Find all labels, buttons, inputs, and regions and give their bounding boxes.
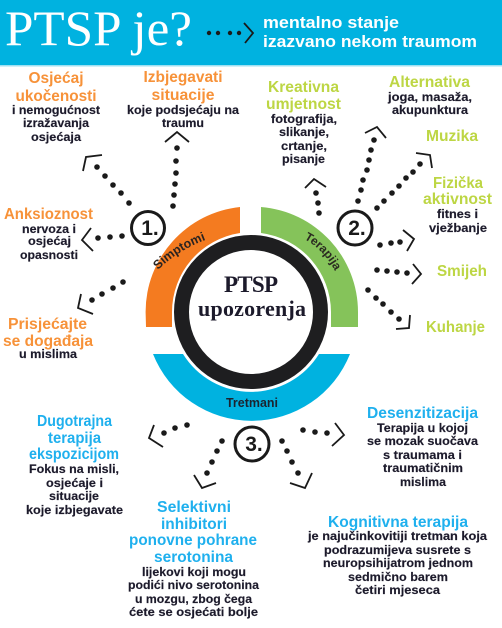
arrow: to Smijeh	[374, 264, 421, 284]
central diagram	[146, 207, 358, 421]
text: Desenzitizacija	[367, 405, 479, 489]
text: Desenzitizacija: mislima	[400, 477, 447, 489]
text: Dugotrajna terapija ekspozicijom: Fokus na misli,	[29, 464, 119, 476]
text: Dugotrajna terapija ekspozicijom: ekspozicijom	[29, 446, 119, 463]
badge 3: 3.	[245, 433, 263, 456]
arc: Tretmani: Tretmani	[226, 395, 278, 410]
text: Muzika: Muzika	[426, 128, 478, 145]
text: Anksioznost: opasnosti	[20, 250, 78, 262]
center title	[198, 272, 306, 321]
badge 1: 1.	[141, 217, 159, 240]
arrow: header	[207, 23, 253, 43]
center title: upozorenja	[198, 296, 306, 321]
ring	[182, 242, 320, 382]
text: Prisjecajte se dogadaja: u mislima	[19, 349, 78, 361]
text: Anksioznost	[4, 206, 93, 262]
badge 2: 2.	[348, 217, 366, 240]
text: Desenzitizacija: Terapija u kojoj	[377, 423, 468, 435]
text: Prisjecajte se dogadaja: se događaja	[3, 333, 93, 350]
text: Kuhanje: Kuhanje	[426, 319, 485, 336]
text: Selektivni inhibitori: lijekovi koji mogu	[142, 567, 246, 579]
text: Kreativna umjetnost	[266, 79, 341, 166]
text: Alternativa	[387, 74, 472, 117]
text: Desenzitizacija: traumatičnim	[383, 463, 463, 475]
arrow: to Dugotrajna terapija	[149, 422, 190, 447]
definition text: mentalno stanje	[263, 13, 399, 32]
text: Izbjegavati situacije: koje podsjećaju na	[127, 105, 240, 117]
text: Kreativna umjetnost: Kreativna	[268, 79, 339, 96]
text: Osjecaj ukocenosti: i nemogućnost	[12, 105, 100, 117]
text: Izbjegavati situacije: traumu	[162, 118, 204, 130]
text: Kreativna umjetnost: pisanje	[282, 154, 325, 166]
text: Kognitivna terapija: Kognitivna terapija	[328, 514, 468, 531]
text: Dugotrajna terapija ekspozicijom: osjećaje i	[46, 478, 103, 490]
text: Selektivni inhibitori	[128, 499, 260, 619]
badge 3	[235, 427, 269, 461]
text: Alternativa: joga, masaža,	[387, 92, 472, 104]
title: PTSP je?	[5, 0, 192, 56]
text: Kreativna umjetnost: umjetnost	[266, 96, 341, 113]
text: Osjecaj ukocenosti: osjećaja	[31, 132, 82, 144]
arrow: to Desenzitizacija	[300, 423, 344, 446]
text: Fizicka aktivnost	[423, 175, 492, 235]
text: Smijeh: Smijeh	[437, 263, 487, 280]
text: Fizicka aktivnost: vježbanje	[429, 223, 487, 235]
badge 2	[338, 211, 372, 245]
definition text	[263, 13, 477, 51]
text: Selektivni inhibitori: u mozgu, zbog čega	[135, 594, 253, 606]
text: Osjecaj ukocenosti: ukočenosti	[16, 88, 96, 105]
text: Anksioznost: Anksioznost	[4, 206, 93, 223]
text: Kognitivna terapija: četiri mjeseca	[355, 585, 441, 597]
text: Kognitivna terapija	[307, 514, 488, 597]
text: Fizicka aktivnost: Fizička	[433, 175, 483, 192]
text: Prisjecajte se dogadaja	[3, 316, 93, 361]
arrow: to Osjecaj ukocenosti	[83, 155, 132, 206]
text: Selektivni inhibitori: ćete se osjećati bolje	[129, 607, 258, 619]
badge 1	[132, 212, 164, 244]
text: Alternativa: akupunktura	[392, 105, 469, 117]
arrow: to Kuhanje	[365, 287, 410, 329]
text: Dugotrajna terapija ekspozicijom: koje izbjegavate	[26, 505, 123, 517]
text: Kreativna umjetnost: slikanje,	[279, 127, 329, 139]
text: Izbjegavati situacije: Izbjegavati	[144, 69, 222, 86]
text: Osjecaj ukocenosti	[12, 70, 100, 144]
text: Dugotrajna terapija ekspozicijom: terapija	[48, 430, 101, 447]
text: Fizicka aktivnost: aktivnost	[423, 191, 492, 208]
text: Izbjegavati situacije: situacije	[152, 87, 215, 104]
text: Dugotrajna terapija ekspozicijom: situacije	[49, 491, 99, 503]
text: Selektivni inhibitori: inhibitori	[161, 516, 227, 533]
arrow: to Izbjegavati situacije	[165, 132, 189, 209]
arrow: to Selektivni inhibitori	[194, 438, 225, 488]
text: Selektivni inhibitori: ponovne pohrane	[129, 532, 257, 549]
text: Osjecaj ukocenosti: izražavanja	[23, 118, 90, 130]
arc: Terapija: Terapija	[306, 232, 340, 271]
definition text: izazvano nekom traumom	[263, 32, 477, 51]
text: Dugotrajna terapija ekspozicijom	[26, 413, 123, 517]
arrow: to Fizicka aktivnost	[377, 230, 414, 251]
text: Desenzitizacija: se mozak suočava	[367, 436, 479, 448]
text: Dugotrajna terapija ekspozicijom: Dugotrajna	[37, 413, 112, 430]
arrow: to Alternativa	[355, 127, 386, 204]
text: Izbjegavati situacije	[127, 69, 240, 130]
text: Prisjecajte se dogadaja: Prisjećajte	[8, 316, 87, 333]
text: Selektivni inhibitori: Selektivni	[157, 499, 231, 516]
arrow: to Muzika	[374, 153, 432, 211]
arc: Tretmani	[153, 354, 350, 421]
arc: Simptomi	[146, 207, 240, 327]
header banner	[0, 0, 502, 66]
text: Desenzitizacija: Desenzitizacija	[367, 405, 478, 422]
arrow: to Kognitivna terapija	[279, 438, 312, 488]
text: Selektivni inhibitori: serotonina	[154, 549, 233, 566]
text: Desenzitizacija: s traumama i	[383, 450, 462, 462]
text: Alternativa: Alternativa	[389, 74, 470, 91]
text: Fizicka aktivnost: fitnes i	[437, 209, 478, 221]
text: Selektivni inhibitori: podići nivo serotonina	[128, 580, 260, 592]
text: Kreativna umjetnost: fotografija,	[271, 114, 337, 126]
arrow: to Anksioznost	[82, 228, 125, 251]
arc: Simptomi: Simptomi	[154, 232, 205, 269]
text: Anksioznost: nervoza i	[22, 224, 76, 236]
arrow: to Prisjecajte se dogadaja	[78, 279, 126, 314]
text: Kognitivna terapija: neuropsihijatrom jednom	[323, 558, 473, 570]
text: Osjecaj ukocenosti: Osjećaj	[28, 70, 84, 87]
arc: Terapija	[261, 207, 358, 327]
text: Kognitivna terapija: je najučinkovitiji tretman koja	[307, 531, 488, 543]
text: Kognitivna terapija: sedmično barem	[348, 572, 448, 584]
text: Kreativna umjetnost: crtanje,	[281, 141, 327, 153]
center title: PTSP	[224, 272, 278, 297]
text: Kognitivna terapija: podrazumijeva susrete s	[324, 545, 471, 557]
arrow: to Kreativna umjetnost	[305, 179, 326, 216]
text: Anksioznost: osjećaj	[28, 236, 71, 248]
